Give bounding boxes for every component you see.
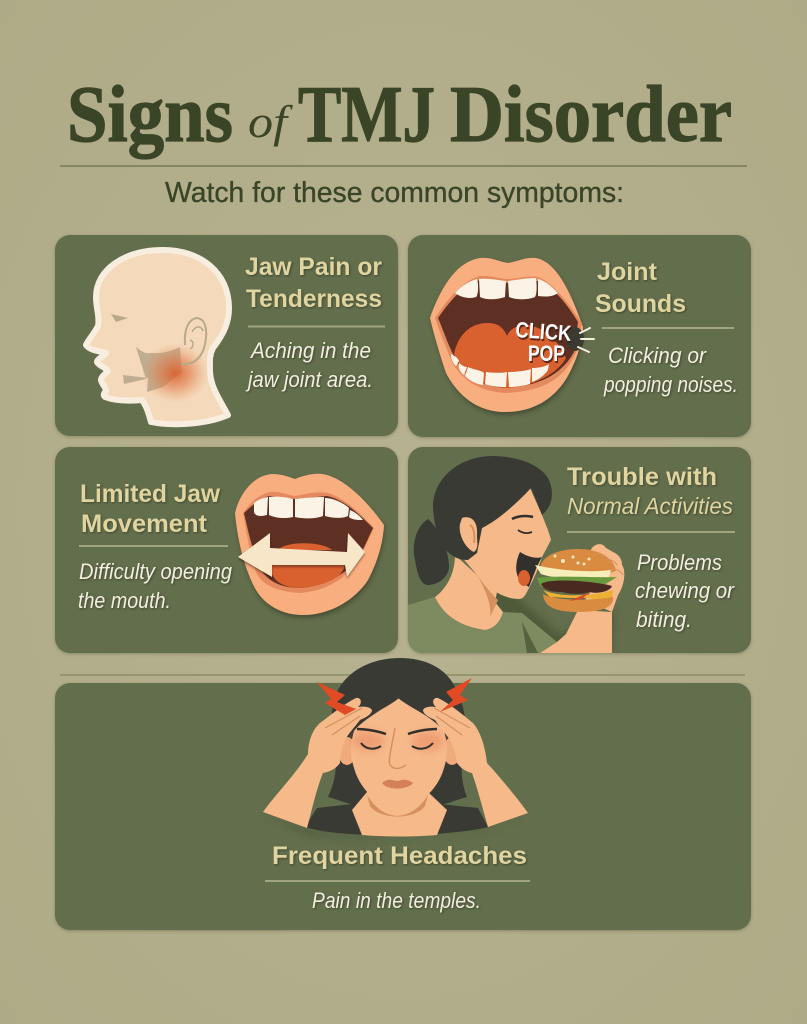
title: Signs xyxy=(67,71,233,159)
description: Clicking or xyxy=(608,343,708,368)
description xyxy=(635,550,736,632)
infographic canvas xyxy=(53,84,753,933)
description xyxy=(603,343,738,397)
title: TMJ xyxy=(298,71,435,159)
panel: frequent headaches xyxy=(55,658,751,930)
heading xyxy=(595,258,686,318)
heading: Sounds xyxy=(595,290,686,318)
icon: mouth with double arrow xyxy=(235,474,384,615)
description: Problems xyxy=(637,550,722,575)
heading: Joint xyxy=(597,258,658,286)
heading xyxy=(245,253,382,313)
icon: open mouth with click and pop: POP xyxy=(528,341,565,366)
heading: Movement xyxy=(81,510,208,538)
heading: Trouble with xyxy=(567,463,717,491)
heading xyxy=(567,463,733,519)
description: the mouth. xyxy=(78,588,171,613)
description: chewing or xyxy=(635,578,736,603)
heading: Limited Jaw xyxy=(80,480,221,508)
title xyxy=(67,71,732,159)
description: jaw joint area. xyxy=(245,367,373,392)
panel: joint sounds xyxy=(408,235,751,437)
heading: Jaw Pain or xyxy=(245,253,382,281)
panel: jaw pain xyxy=(55,235,398,436)
heading xyxy=(80,480,221,538)
icon: open mouth with click and pop xyxy=(430,258,594,412)
panel: limited jaw movement xyxy=(55,447,398,653)
icon: woman holding her temples xyxy=(263,658,528,837)
subtitle: Watch for these common symptoms: xyxy=(165,177,624,209)
description: biting. xyxy=(636,607,692,632)
description: Aching in the xyxy=(249,338,371,363)
description xyxy=(245,338,373,392)
heading: Tenderness xyxy=(246,285,382,313)
icon: open mouth with click and pop: CLICK xyxy=(515,317,572,346)
panel: trouble with normal activities xyxy=(408,447,751,660)
heading: Frequent Headaches xyxy=(272,842,527,870)
title: of xyxy=(248,96,294,147)
title: Disorder xyxy=(450,71,732,159)
description: Pain in the temples. xyxy=(312,888,481,913)
heading: Normal Activities xyxy=(567,493,733,519)
description: Difficulty opening xyxy=(79,559,233,584)
icon: head profile xyxy=(86,250,229,424)
description xyxy=(78,559,233,613)
icon: woman biting a burger xyxy=(408,456,624,660)
description: popping noises. xyxy=(603,372,738,397)
